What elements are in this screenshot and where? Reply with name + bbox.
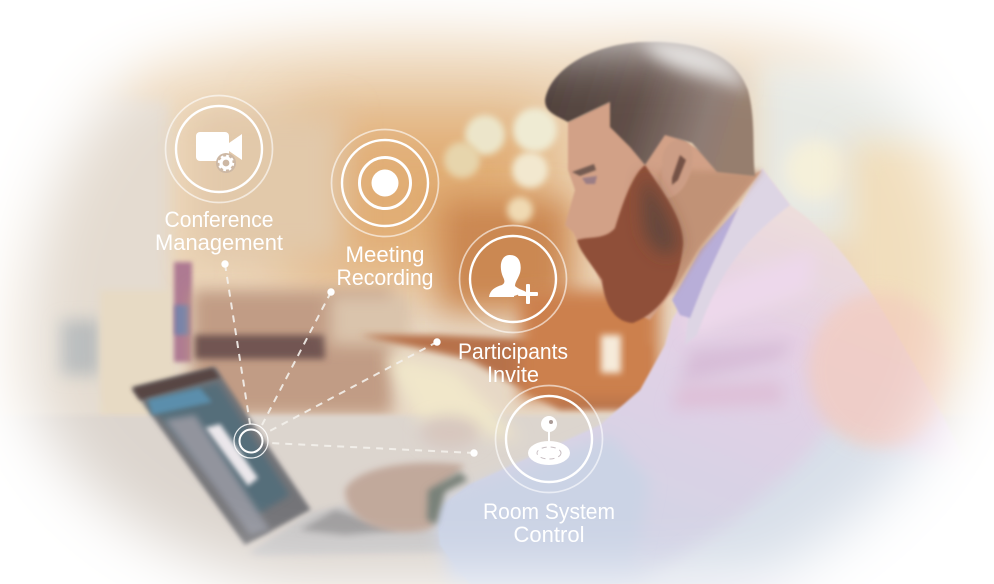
hub: connection origin rings <box>234 424 268 458</box>
photo wash <box>133 47 757 540</box>
man: shirt and arm <box>432 170 940 584</box>
feature: Meeting Recording <box>332 130 438 290</box>
label: Management <box>155 230 284 255</box>
feature: Participants Invite <box>458 226 568 387</box>
man: face and neck <box>565 100 762 320</box>
label: Participants <box>458 339 568 364</box>
feature: Conference Management <box>155 96 284 255</box>
label: Meeting <box>346 242 424 267</box>
icon: joystick <box>528 416 570 465</box>
connector: dashed lines from hub to features <box>225 264 474 453</box>
icon: record button <box>360 158 410 208</box>
label: Control <box>514 522 584 547</box>
feature: Room System Control <box>483 386 615 547</box>
man: beard <box>577 165 683 323</box>
endpoint dots <box>221 260 478 457</box>
label: Invite <box>487 362 539 387</box>
man: hair <box>545 42 755 176</box>
man: hand on keyboard <box>345 463 468 532</box>
label: Conference <box>164 207 274 232</box>
label: Recording <box>336 265 434 290</box>
icon: video camera with gear <box>196 132 242 173</box>
icon: person with plus <box>489 255 538 304</box>
label: Room System <box>483 499 615 524</box>
blurred laptop <box>132 367 460 556</box>
